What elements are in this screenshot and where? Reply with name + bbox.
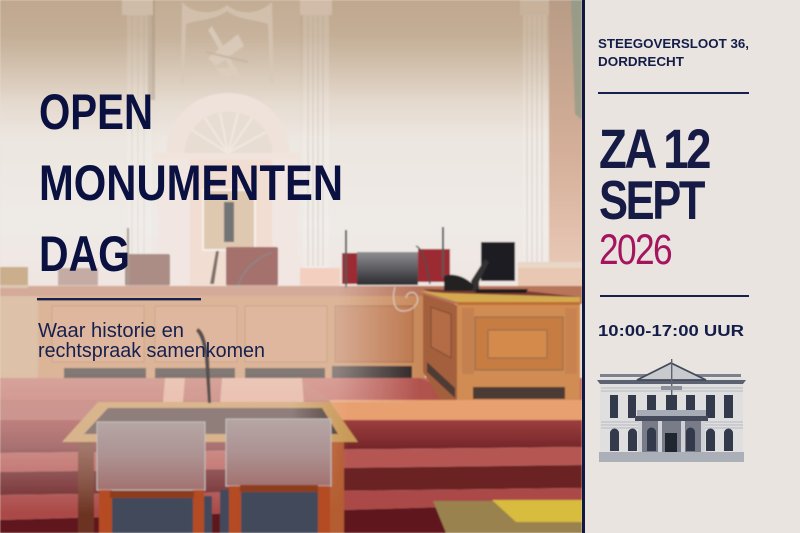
arched niche with shell	[184, 93, 274, 154]
date rule	[600, 295, 749, 297]
subtitle	[38, 320, 265, 362]
title rule	[37, 298, 201, 300]
chairs in front	[97, 419, 331, 533]
microphone on table	[196, 328, 211, 403]
upper windows	[610, 395, 733, 418]
entrance door	[665, 433, 677, 457]
lower left haze	[0, 402, 341, 508]
title: OPEN	[39, 84, 153, 140]
desk and carpet haze	[0, 284, 412, 403]
sidebar panel	[582, 0, 800, 533]
title: DAG	[39, 226, 130, 282]
pilasters	[122, 0, 582, 300]
balcony	[637, 410, 706, 416]
desk top	[0, 286, 582, 304]
wall	[0, 0, 582, 300]
portrait doorway	[190, 160, 272, 286]
monitors and equipment	[127, 227, 528, 311]
desk front	[0, 266, 426, 379]
red judge chairs	[58, 247, 450, 286]
small table with gold edge	[62, 402, 358, 533]
portico recess	[642, 420, 702, 454]
date: ZA 12	[599, 117, 710, 180]
address	[598, 36, 749, 69]
address: STEEGOVERSLOOT 36,	[598, 36, 749, 51]
date: 2026	[599, 226, 672, 274]
wall panel with plaster ornament	[148, 2, 274, 100]
foreground table corner	[433, 500, 582, 533]
portico columns	[638, 421, 705, 457]
title	[39, 84, 343, 282]
photo: courtroom interior	[0, 0, 582, 533]
date: SEPT	[599, 169, 705, 231]
address rule	[598, 92, 749, 94]
date	[599, 117, 710, 274]
icon: courthouse building	[597, 359, 746, 462]
opening hours: 10:00-17:00 UUR	[598, 323, 745, 340]
address: DORDRECHT	[598, 54, 684, 69]
carpet floor and steps	[0, 378, 582, 533]
title: MONUMENTEN	[39, 155, 343, 211]
subtitle: rechtspraak samenkomen	[38, 340, 265, 362]
desk corner	[420, 289, 580, 400]
navy divider	[582, 0, 585, 533]
subtitle: Waar historie en	[38, 320, 184, 342]
lower windows	[610, 428, 733, 451]
